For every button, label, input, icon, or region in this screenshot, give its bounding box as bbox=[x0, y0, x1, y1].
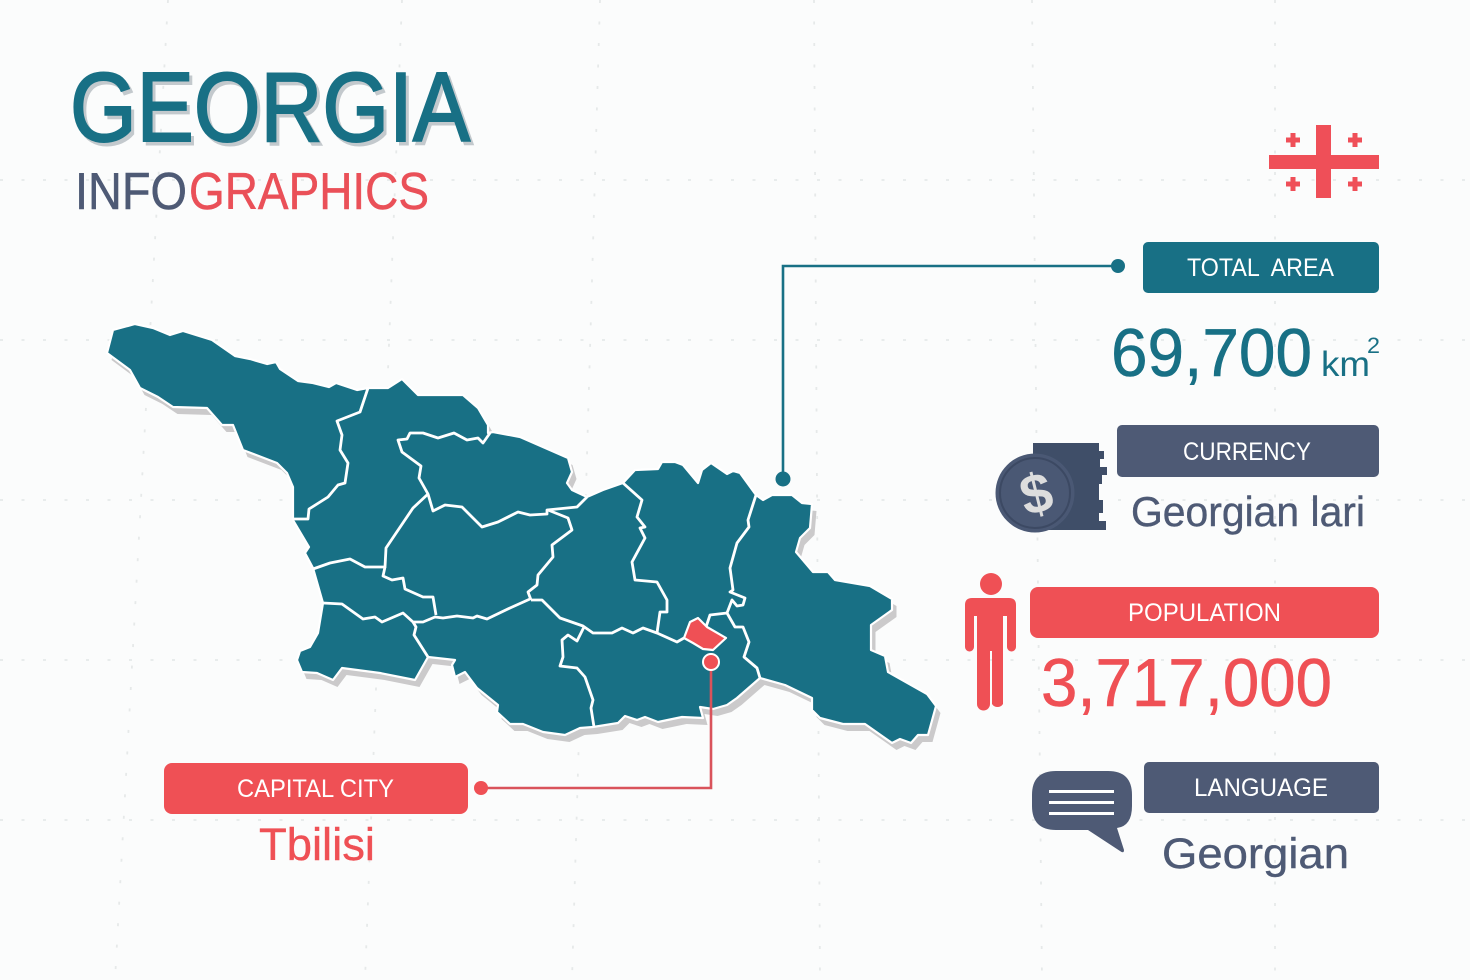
callout: population label: POPULATION bbox=[1128, 599, 1281, 627]
callout: total area label bbox=[1143, 242, 1379, 293]
capital region: Tbilisi bbox=[684, 618, 726, 650]
callout: population label bbox=[1030, 587, 1379, 638]
currency value: Georgian lari bbox=[1131, 488, 1365, 535]
callout: language label: LANGUAGE bbox=[1194, 774, 1328, 802]
callout: total area leader line bbox=[776, 259, 1125, 486]
total area value: 69,700 bbox=[1111, 315, 1312, 391]
total area value: km bbox=[1321, 345, 1370, 384]
title: GEORGIA bbox=[73, 56, 474, 166]
map regions bbox=[107, 324, 936, 743]
icon: coin stack bbox=[996, 443, 1107, 532]
subtitle: INFO bbox=[75, 163, 187, 221]
icon: Georgian flag bbox=[1269, 125, 1379, 198]
icon: coin stack: $ bbox=[1013, 459, 1059, 528]
callout: language label bbox=[1144, 762, 1379, 813]
population value: 3,717,000 bbox=[1041, 645, 1332, 721]
total area value: 2 bbox=[1367, 333, 1380, 358]
subtitle bbox=[75, 163, 429, 221]
icon: person bbox=[965, 573, 1016, 710]
callout: total area label: TOTAL AREA bbox=[1187, 254, 1334, 282]
title: GEORGIA bbox=[70, 52, 471, 162]
subtitle: GRAPHICS bbox=[189, 163, 429, 221]
callout: currency label bbox=[1117, 425, 1379, 477]
callout: capital city label bbox=[164, 763, 468, 814]
icon: speech bubble bbox=[1032, 771, 1132, 852]
capital city value: Tbilisi bbox=[259, 819, 375, 870]
map of Georgia bbox=[107, 324, 940, 750]
callout: currency label: CURRENCY bbox=[1183, 438, 1311, 466]
language value: Georgian bbox=[1162, 830, 1349, 878]
callout: capital city label: CAPITAL CITY bbox=[237, 775, 394, 803]
region borders bbox=[293, 388, 760, 727]
callout: capital city leader line bbox=[474, 654, 719, 795]
map shadow bbox=[112, 331, 940, 750]
